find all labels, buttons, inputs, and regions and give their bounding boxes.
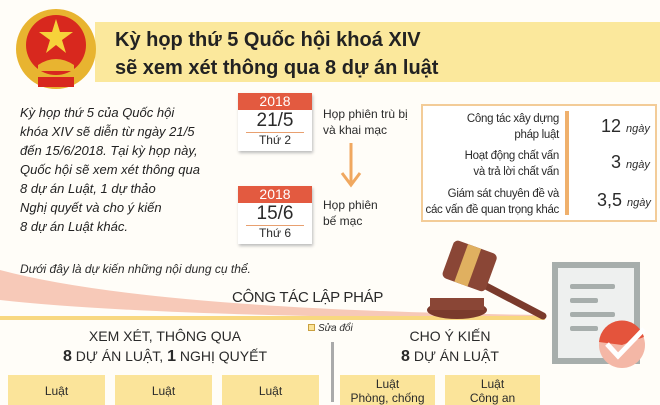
calendar: 21/5: Thứ 2 <box>259 133 291 147</box>
heading: xem xét thông qua: 8 DỰ ÁN LUẬT, 1 NGHỊ QUYẾT <box>63 348 267 365</box>
text: Luật <box>481 377 504 391</box>
panel: schedule: Giám sát chuyên đề và <box>448 188 559 200</box>
swoosh <box>0 270 545 320</box>
heading: xem xét thông qua: XEM XÉT, THÔNG QUA <box>89 328 241 344</box>
divider line <box>331 342 334 402</box>
intro paragraph: Kỳ họp thứ 5 của Quốc hội <box>20 105 174 120</box>
text: Luật <box>259 384 282 398</box>
icon: national emblem <box>16 9 96 89</box>
heading: cho ý kiến <box>401 328 499 365</box>
text: opening: và khai mạc <box>323 123 387 137</box>
text: Phòng, chống <box>350 391 425 405</box>
panel: schedule: Công tác xây dựng <box>467 113 559 125</box>
text: closing <box>323 198 378 228</box>
law boxes: Luật <box>45 384 68 398</box>
intro paragraph: 8 dự án Luật khác. <box>20 219 128 234</box>
text: closing: bế mạc <box>323 214 362 228</box>
panel: schedule: 3,5 ngày <box>597 190 651 210</box>
intro paragraph: khóa XIV sẽ diễn từ ngày 21/5 <box>20 124 194 139</box>
heading: cho ý kiến: CHO Ý KIẾN <box>410 328 490 344</box>
intro paragraph: Quốc hội sẽ xem xét thông qua <box>20 162 200 177</box>
calendar: 21/5 <box>238 93 312 151</box>
heading: Công tác lập pháp: CÔNG TÁC LẬP PHÁP <box>232 289 383 306</box>
heading: xem xét thông qua <box>63 328 267 365</box>
panel: schedule: pháp luật <box>514 129 559 141</box>
text: Luật <box>152 384 175 398</box>
intro paragraph: 8 dự án Luật, 1 dự thảo <box>20 181 156 196</box>
title <box>115 29 438 79</box>
law boxes <box>8 375 105 405</box>
text: Công an <box>470 391 515 405</box>
calendar: 15/6 <box>238 186 312 244</box>
text: opening: Họp phiên trù bị <box>323 107 408 121</box>
subtitle text: Dưới đây là dự kiến những nội dung cụ thể. <box>20 262 251 276</box>
text: Luật <box>376 377 399 391</box>
title: Kỳ họp thứ 5 Quốc hội khoá XIV <box>115 29 421 51</box>
intro paragraph: đến 15/6/2018. Tại kỳ họp này, <box>20 143 198 158</box>
calendar: 15/6: Thứ 6 <box>259 226 291 240</box>
icon: gavel <box>427 240 546 320</box>
calendar: 15/6: 15/6 <box>256 203 293 224</box>
calendar: 21/5: 21/5 <box>256 110 293 131</box>
panel: schedule: Hoạt động chất vấn <box>465 150 559 162</box>
panel: schedule: 12 ngày <box>601 116 650 136</box>
panel: schedule: các vấn đề quan trọng khác <box>426 204 559 216</box>
text: closing: Họp phiên <box>323 198 378 212</box>
calendar: 21/5: 2018 <box>259 93 291 109</box>
heading: cho ý kiến: 8 DỰ ÁN LUẬT <box>401 348 499 365</box>
panel: schedule: 3 ngày <box>611 152 650 172</box>
title: sẽ xem xét thông qua 8 dự án luật <box>115 57 438 79</box>
title band <box>95 22 660 82</box>
arrow <box>340 143 362 188</box>
icon: document with check <box>552 262 645 368</box>
text: opening <box>323 107 408 137</box>
intro paragraph <box>20 105 200 234</box>
legend: Sửa đổi <box>318 323 353 334</box>
calendar: 15/6: 2018 <box>259 186 291 202</box>
panel: schedule <box>421 104 657 222</box>
intro paragraph: Nghị quyết và cho ý kiến <box>20 200 162 215</box>
panel: schedule: và trả lời chất vấn <box>473 166 559 178</box>
